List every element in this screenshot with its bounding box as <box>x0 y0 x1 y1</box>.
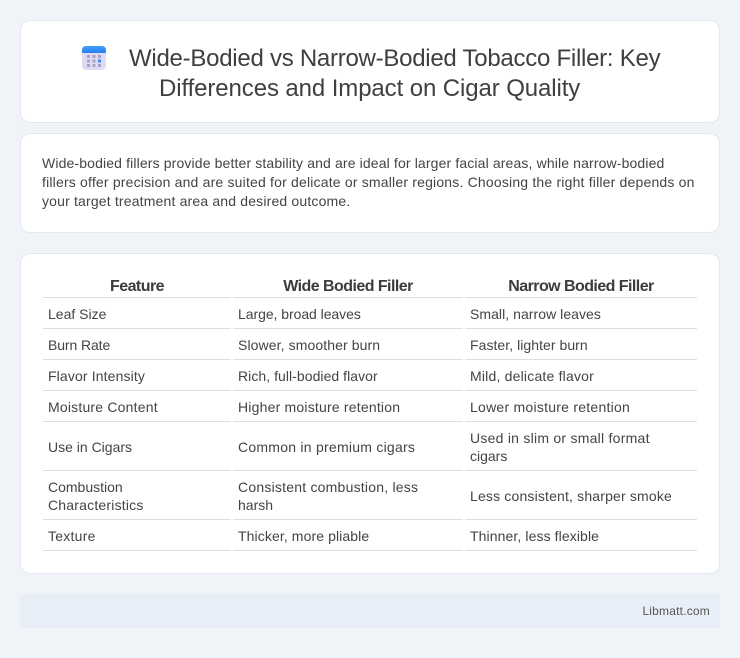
row: Burn Rate: Burn Rate <box>48 337 110 353</box>
panel: comparison table card <box>20 253 720 574</box>
row: Flavor Intensity: Flavor Intensity <box>48 368 145 384</box>
summary text: your target treatment area and desired outcome. <box>42 193 350 209</box>
footer text: Libmatt.com <box>642 604 710 618</box>
Moisture Content narrow: Lower moisture retention <box>470 399 630 415</box>
table header: Feature: Feature <box>110 278 164 295</box>
Combustion wide <box>238 479 418 513</box>
Flavor Intensity wide: Rich, full-bodied flavor <box>238 368 378 384</box>
summary text: Wide-bodied fillers provide better stability and are ideal for larger facial areas, while narrow-bodied <box>42 155 664 171</box>
Combustion wide: harsh <box>238 497 273 513</box>
Combustion wide: Consistent combustion, less <box>238 479 418 495</box>
Burn Rate narrow: Faster, lighter burn <box>470 337 588 353</box>
table header: Narrow Bodied Filler: Narrow Bodied Filler <box>508 278 654 295</box>
footer bar <box>20 594 720 628</box>
Use in Cigars narrow <box>470 430 650 464</box>
table header: Wide Bodied Filler: Wide Bodied Filler <box>283 278 413 295</box>
Use in Cigars narrow: cigars <box>470 448 507 464</box>
Flavor Intensity narrow: Mild, delicate flavor <box>470 368 594 384</box>
Burn Rate wide: Slower, smoother burn <box>238 337 380 353</box>
row: Use in Cigars: Use in Cigars <box>48 439 132 455</box>
row: Leaf Size: Leaf Size <box>48 306 106 322</box>
row: Combustion Characteristics <box>48 479 144 513</box>
Texture wide: Thicker, more pliable <box>238 528 369 544</box>
Leaf Size wide: Large, broad leaves <box>238 306 361 322</box>
row: Moisture Content: Moisture Content <box>48 399 158 415</box>
summary text <box>42 155 695 209</box>
Leaf Size narrow: Small, narrow leaves <box>470 306 601 322</box>
Combustion narrow: Less consistent, sharper smoke <box>470 488 672 504</box>
icon: calendar <box>82 46 106 70</box>
title: Wide-Bodied vs Narrow-Bodied Tobacco Filler: Key <box>129 45 660 72</box>
Use in Cigars wide: Common in premium cigars <box>238 439 415 455</box>
Moisture Content wide: Higher moisture retention <box>238 399 400 415</box>
summary text: fillers offer precision and are suited for delicate or smaller regions. Choosing the right filler depends on <box>42 174 695 190</box>
title <box>129 45 660 102</box>
title: Differences and Impact on Cigar Quality <box>159 75 580 102</box>
row: Texture: Texture <box>48 528 96 544</box>
panel: summary card <box>20 133 720 233</box>
Use in Cigars narrow: Used in slim or small format <box>470 430 650 446</box>
panel: title card <box>20 20 720 123</box>
Texture narrow: Thinner, less flexible <box>470 528 599 544</box>
row: Combustion Characteristics: Characteristics <box>48 497 144 513</box>
row: Combustion Characteristics: Combustion <box>48 479 123 495</box>
